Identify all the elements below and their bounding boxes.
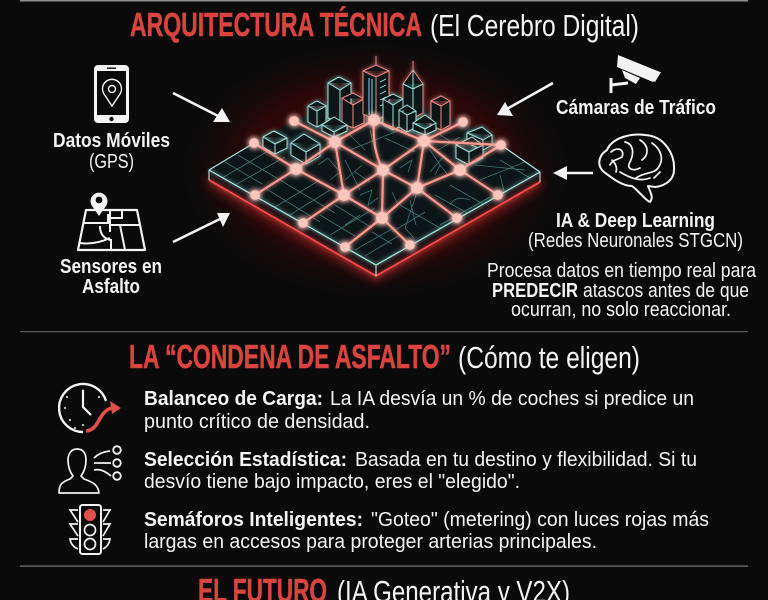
text block: procesa datos: atascos antes de que xyxy=(583,280,749,302)
text block: procesa datos xyxy=(487,260,757,321)
map slab xyxy=(209,90,540,276)
icon: person selected xyxy=(59,446,121,493)
text block: procesa datos: PREDECIR xyxy=(492,280,578,302)
icon: brain xyxy=(599,135,674,202)
heading: el futuro xyxy=(198,572,570,600)
icon: clock with red arrow xyxy=(59,384,121,432)
icon: smartphone xyxy=(94,65,129,123)
label: cámaras de tráfico: Cámaras de Tráfico xyxy=(556,97,716,119)
text: semáforos inteligentes: "Goteo" (metering) con luces rojas más xyxy=(371,508,709,531)
text: semáforos inteligentes: largas en accesos para proteger arterias principales. xyxy=(144,530,597,553)
arrow: móviles to map xyxy=(173,93,230,122)
text: selección estadística xyxy=(144,448,697,493)
heading: la condena de asfalto: LA “CONDENA DE ASFALTO” xyxy=(129,338,451,375)
label: datos móviles xyxy=(53,130,170,173)
text: semáforos inteligentes xyxy=(144,508,709,553)
icon: security camera xyxy=(611,55,661,93)
text: selección estadística: Selección Estadística: xyxy=(144,448,347,471)
text: balanceo de carga: Balanceo de Carga: xyxy=(144,387,323,410)
heading: arquitectura técnica: ARQUITECTURA TÉCNICA xyxy=(130,6,422,43)
text: balanceo de carga: punto crítico de densidad. xyxy=(144,410,370,433)
heading: la condena de asfalto: (Cómo te eligen) xyxy=(458,340,640,375)
text: balanceo de carga: La IA desvía un % de coches si predice un xyxy=(330,387,694,410)
label: sensores en asfalto xyxy=(60,256,162,298)
buildings xyxy=(263,56,492,165)
arrow: IA to map xyxy=(553,166,593,180)
label: IA y deep learning xyxy=(528,210,743,252)
red glow behind map xyxy=(170,35,580,305)
text: selección estadística: Basada en tu destino y flexibilidad. Si tu xyxy=(355,448,697,471)
text block: procesa datos: ocurran, no solo reaccionar. xyxy=(511,299,731,321)
network links xyxy=(254,120,501,247)
label: sensores en asfalto: Asfalto xyxy=(82,276,140,298)
icon: map with pin xyxy=(78,193,145,250)
heading: arquitectura técnica: (El Cerebro Digital) xyxy=(430,8,639,43)
street network xyxy=(222,125,530,256)
label: sensores en asfalto: Sensores en xyxy=(60,256,162,278)
arrow: sensores to map xyxy=(173,213,230,242)
text: balanceo de carga xyxy=(144,387,694,433)
network nodes xyxy=(249,114,506,252)
isometric city map xyxy=(209,56,540,276)
text: semáforos inteligentes: Semáforos Inteligentes: xyxy=(144,508,363,531)
label: IA y deep learning: IA & Deep Learning xyxy=(556,210,715,232)
label: datos móviles: Datos Móviles xyxy=(53,130,170,152)
label: datos móviles: (GPS) xyxy=(89,151,134,173)
icon: traffic light xyxy=(70,505,110,554)
arrow: cámaras to map xyxy=(497,83,553,116)
text: selección estadística: desvío tiene bajo impacto, eres el "elegido". xyxy=(144,470,520,493)
